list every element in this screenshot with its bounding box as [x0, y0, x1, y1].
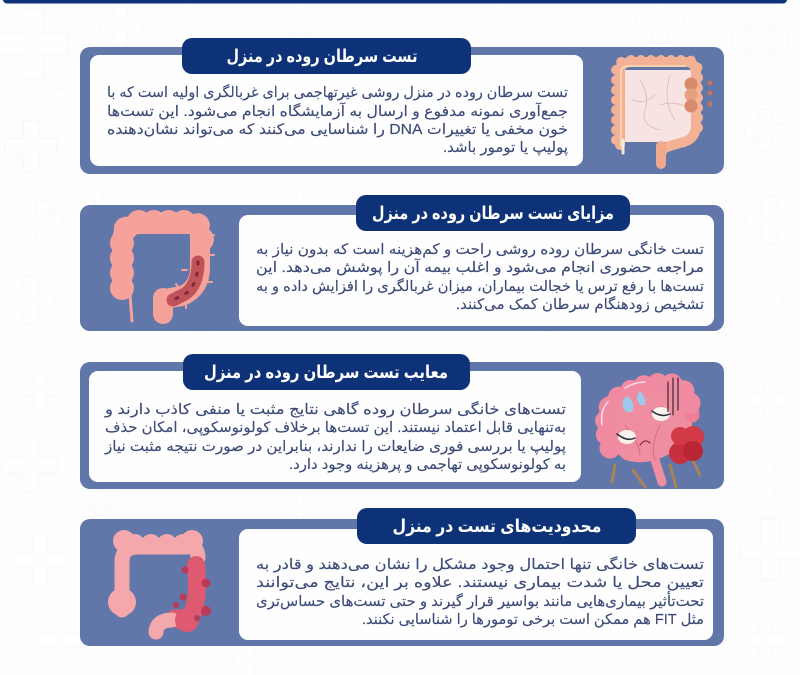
heading — [357, 508, 636, 544]
text block: تست خانگی سرطان روده روشی راحت و کم‌هزینه است که بدون نیاز به — [256, 241, 704, 258]
text block: تشخیص زودهنگام سرطان کمک می‌کنند. — [456, 296, 704, 313]
heading — [183, 354, 470, 390]
text block: تحت‌تأثیر بیماری‌هایی مانند بواسیر قرار گیرند و حتی تست‌های حساس‌تری — [256, 591, 704, 610]
text block: پولیپ یا تومور باشد. — [443, 140, 568, 156]
icon: sad cartoon intestine — [602, 378, 704, 487]
heading: مزایای تست سرطان روده در منزل — [372, 203, 614, 224]
text block: تست سرطان روده در منزل روشی غیرتهاجمی برای غربالگری اولیه است که با — [107, 84, 568, 101]
panel: advantages — [80, 195, 724, 331]
panel: limitations — [80, 508, 724, 646]
heading — [356, 195, 630, 231]
icon: large intestine with polyps highlighted — [108, 530, 211, 632]
text block: تست‌های خانگی تنها احتمال وجود مشکل را نشان می‌دهند و قادر به — [256, 556, 704, 573]
text block: تست‌ها با رفع ترس یا خجالت بیماران، میزان غربالگری را افزایش داده و به — [256, 278, 704, 295]
heading — [182, 38, 471, 74]
text block: جمع‌آوری نمونه مدفوع و ارسال به آزمایشگاه انجام می‌شود. این تست‌ها — [107, 102, 568, 120]
text block — [107, 84, 568, 156]
text block: پولیپ یا بررسی فوری ضایعات را ندارند، بنابراین در صورت نتیجه مثبت نیاز — [104, 439, 566, 455]
text block: خون مخفی یا تغییرات DNA را شناسایی می‌کنند که می‌تواند نشان‌دهنده — [107, 122, 568, 138]
heading: محدودیت‌های تست در منزل — [392, 516, 602, 537]
text block: تست‌های خانگی سرطان روده گاهی نتایج مثبت یا منفی کاذب دارند و — [104, 401, 566, 418]
panel: home colon cancer test — [80, 38, 724, 174]
text block: به‌تنهایی قابل اعتماد نیستند. این تست‌ها برخلاف کولونوسکوپی، امکان حذف — [105, 420, 566, 436]
panel: disadvantages — [80, 354, 724, 489]
icon: large intestine with tumour section — [122, 222, 214, 321]
text block — [256, 241, 704, 313]
text block: به کولونوسکوپی تهاجمی و پرهزینه وجود دارد. — [289, 457, 566, 473]
top navy bar — [3, 0, 787, 4]
heading: معایب تست سرطان روده در منزل — [204, 362, 448, 383]
icon: large intestine with polyps — [616, 60, 712, 164]
text block — [104, 401, 566, 473]
heading: تست سرطان روده در منزل — [226, 46, 418, 67]
text block: مراجعه حضوری انجام می‌شود و اغلب بیمه آن را پوشش می‌دهد. این — [256, 258, 704, 276]
text block: مثل FIT هم ممکن است برخی تومورها را شناسایی نکنند. — [362, 612, 704, 628]
text block: تعیین محل یا شدت بیماری نیستند. علاوه بر این، نتایج می‌توانند — [256, 575, 704, 591]
text block — [256, 556, 704, 628]
